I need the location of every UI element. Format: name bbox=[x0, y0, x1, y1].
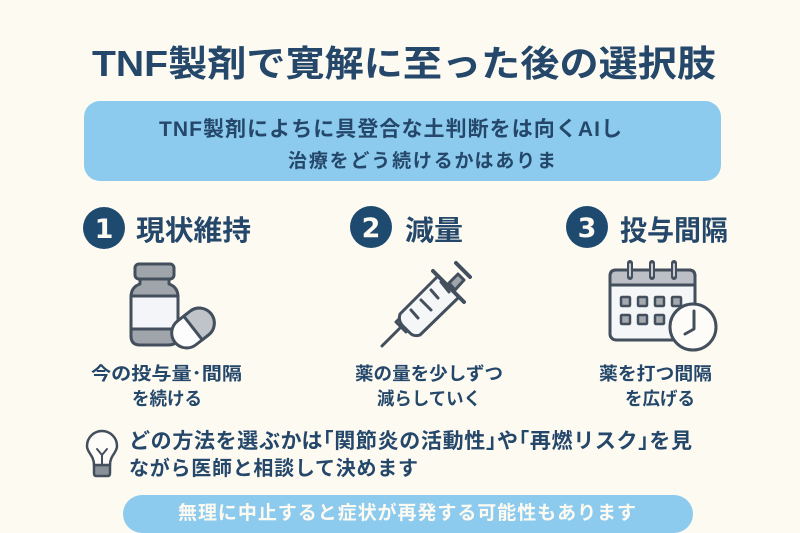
number badge 1: 1 bbox=[95, 214, 113, 245]
heading: 投与間隔: 投与間隔 bbox=[620, 215, 728, 246]
guidance text: どの方法を選ぶかは｢関節炎の活動性｣や｢再燃リスク｣を見 bbox=[129, 430, 692, 453]
option 2: dose reduction bbox=[350, 206, 503, 409]
description 2: 薬の量を少しずつ bbox=[355, 364, 503, 384]
panel: warning pill bbox=[123, 495, 693, 533]
option 1: maintain bbox=[83, 207, 251, 409]
description 1: 今の投与量･間隔 bbox=[91, 363, 242, 384]
warning text: 無理に中止すると症状が再発する可能性もあります bbox=[178, 501, 636, 524]
guidance text: ながら医師と相談して決めます bbox=[129, 456, 418, 480]
description 1 bbox=[91, 363, 242, 409]
icon: light bulb bbox=[87, 431, 117, 476]
number badge 2 bbox=[350, 206, 392, 248]
description 3: を広げる bbox=[625, 389, 695, 409]
heading: 減量: 減量 bbox=[405, 215, 463, 246]
option 3: dosing interval bbox=[566, 206, 728, 409]
description 2 bbox=[355, 364, 503, 409]
number badge 3: 3 bbox=[578, 213, 596, 244]
description 2: 減らしていく bbox=[377, 388, 481, 409]
number badge 3 bbox=[566, 206, 608, 248]
number badge 2: 2 bbox=[362, 213, 380, 244]
intro text line 1: TNF製剤によちに具登合な土判断をは向くAIし bbox=[159, 118, 622, 141]
icon: calendar and clock bbox=[610, 263, 716, 350]
heading: 現状維持: 現状維持 bbox=[136, 215, 251, 246]
icon: medicine bottle and capsule bbox=[131, 264, 220, 354]
title: TNF製剤で寛解に至った後の選択肢 bbox=[92, 43, 716, 84]
description 3 bbox=[599, 364, 712, 409]
description 1: を続ける bbox=[132, 388, 202, 409]
number badge 1 bbox=[83, 207, 125, 249]
intro text line 2: 治療をどう続けるかはありま bbox=[288, 150, 556, 172]
guidance text bbox=[129, 430, 692, 480]
panel: intro banner bbox=[84, 101, 721, 181]
icon: syringe bbox=[382, 263, 470, 346]
description 3: 薬を打つ間隔 bbox=[599, 364, 712, 384]
